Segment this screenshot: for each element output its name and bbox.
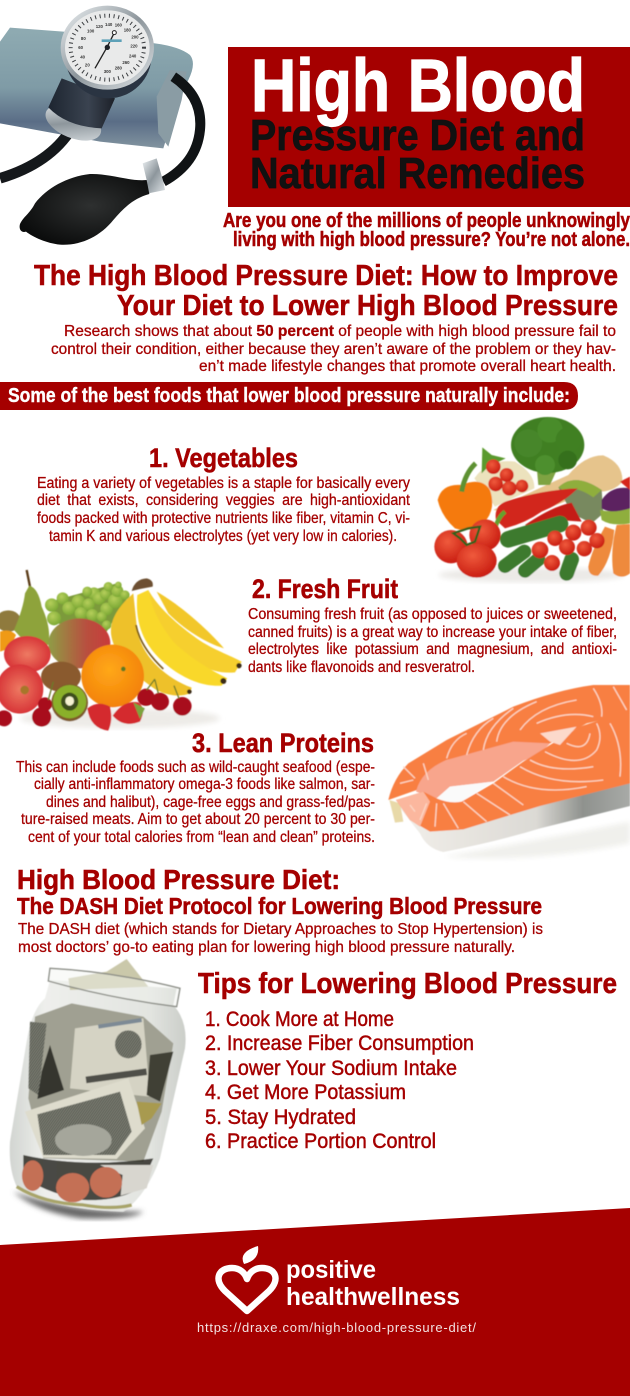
dial numbers: 60: [78, 45, 84, 50]
jar rim: [48, 968, 180, 1007]
cherry tomatoes front: [532, 520, 605, 571]
body: vegetables: tamin K and various electrolytes (yet very low in calories).: [49, 528, 397, 545]
title line 2: Pressure Diet and: [250, 111, 585, 160]
source url: https://draxe.com/high-blood-pressure-diet/: [197, 1320, 476, 1335]
gauge neck: [48, 78, 115, 128]
brand name: [286, 1256, 460, 1311]
body: lean proteins: [16, 759, 375, 846]
pale left edge: [396, 792, 430, 827]
heading: fresh fruit: 2. Fresh Fruit: [252, 574, 398, 604]
bill seal: [55, 1124, 112, 1156]
bulb: [20, 174, 149, 245]
cherry tomatoes top: [486, 459, 528, 496]
cuff fold: [157, 70, 187, 147]
bananas: [111, 578, 242, 696]
valve: [143, 158, 165, 193]
block: fresh fruit text: [248, 574, 617, 676]
pale center: [540, 727, 577, 745]
body: lean proteins: ture-raised meats. Aim to get about 20 percent to 30 per-: [21, 811, 375, 828]
dial numbers: 300: [104, 69, 112, 74]
red tip: [620, 477, 630, 490]
dial numbers: [78, 22, 139, 74]
strawberry leaves: [133, 702, 145, 719]
dial numbers: 40: [80, 54, 86, 59]
title line 3: Natural Remedies: [250, 149, 585, 198]
kiwi brown: [41, 662, 81, 692]
jar body: [10, 980, 186, 1212]
illustration: fresh fruit: [0, 570, 242, 731]
dial numbers: 160: [115, 23, 123, 28]
orange: [81, 645, 144, 707]
body: fresh fruit: [248, 606, 617, 676]
dial numbers: 220: [130, 43, 138, 48]
footer background: [0, 1208, 630, 1396]
orange slice back: [0, 631, 16, 652]
dial numbers: 120: [96, 24, 104, 29]
red chilies: [494, 488, 582, 536]
strawberries: [87, 702, 143, 731]
illustration: blood pressure cuff and gauge: [0, 6, 200, 245]
title panel: [228, 44, 630, 207]
hole: [437, 782, 493, 802]
frilly greens: [558, 480, 603, 523]
body: vegetables: foods packed with protective nutrients like fiber, vitamin C, vi-: [37, 510, 410, 527]
orange pepper: [438, 463, 492, 530]
floor shadow: [438, 568, 625, 582]
cauliflower and leaf: [474, 461, 534, 507]
dial numbers: 140: [105, 22, 113, 27]
block: vegetables text: [37, 443, 410, 545]
dial numbers: 100: [87, 29, 95, 34]
body: lean proteins: cially anti-inflammatory omega-3 foods like salmon, sar-: [34, 776, 375, 793]
skin: [395, 782, 630, 852]
floor shadow: [20, 708, 220, 728]
bill portrait: [115, 1030, 142, 1058]
body: lean proteins: dines and halibut), cage-free eggs and grass-fed/pas-: [46, 794, 375, 811]
section intro text: Research shows that about 50 percent of people with high blood pressure fail to: [64, 323, 616, 340]
kale frill: [600, 508, 630, 524]
tips list: 1. Cook More at Home: [205, 1008, 394, 1031]
section heading: [34, 260, 618, 322]
brand name: positive: [286, 1256, 376, 1284]
red apple back: [4, 636, 51, 673]
cuff: [0, 28, 193, 148]
heading: lean proteins: 3. Lean Proteins: [192, 728, 374, 758]
body: DASH: [18, 921, 543, 956]
coin wrapper: [100, 1165, 153, 1196]
base dark: [23, 1155, 153, 1200]
dial numbers: 200: [131, 35, 139, 40]
tips list: 5. Stay Hydrated: [205, 1106, 356, 1129]
carrots: [588, 524, 630, 577]
left tail: [389, 800, 403, 823]
bill text: [86, 1072, 147, 1080]
squash: [493, 455, 622, 517]
intro question: [223, 210, 630, 251]
illustration: salmon steak: [388, 685, 630, 858]
cherries: [0, 689, 192, 727]
left bill dark engraving: [28, 1022, 47, 1095]
dial numbers: 180: [124, 27, 132, 32]
heading: DASH line 2: The DASH Diet Protocol for Lowering Blood Pressure: [17, 893, 542, 919]
body: lean proteins: cent of your total calories from “lean and clean” proteins.: [28, 829, 375, 846]
bills behind: [28, 1003, 173, 1162]
body: vegetables: [37, 475, 410, 545]
dial numbers: 80: [81, 36, 86, 41]
fat lines: [400, 687, 627, 828]
yellow bill: [137, 1102, 162, 1125]
illustration: money jar: [10, 959, 186, 1219]
tips list: 3. Lower Your Sodium Intake: [205, 1057, 457, 1080]
right tube: [163, 77, 200, 182]
broccoli: [511, 417, 584, 485]
block: lean proteins text: [16, 728, 375, 846]
footer: [0, 1208, 630, 1396]
section intro text: control their condition, either because they aren’t aware of the problem or they hav-: [51, 341, 616, 358]
coins: [22, 1160, 122, 1202]
jar shadow: [13, 1192, 143, 1219]
front bill engraving: [37, 1092, 132, 1155]
body: lean proteins: This can include foods such as wild-caught seafood (espe-: [16, 759, 375, 776]
gauge dial: [61, 6, 154, 98]
orange stem: [121, 667, 126, 671]
grapes: [45, 582, 130, 632]
kiwi slice: [51, 684, 88, 721]
body: DASH: most doctors’ go-to eating plan for lowering high blood pressure naturally.: [18, 939, 515, 956]
tips list: 6. Practice Portion Control: [205, 1130, 436, 1153]
bill sticking out top: [68, 959, 148, 990]
kiwi back: [0, 610, 21, 632]
tips list: 2. Increase Fiber Consumption: [205, 1032, 474, 1055]
body: DASH: The DASH diet (which stands for Dietary Approaches to Stop Hypertension) is: [18, 921, 543, 938]
heading: DASH line 1: High Blood Pressure Diet:: [17, 864, 340, 895]
serial number: [98, 1020, 142, 1027]
tomato stem: [453, 527, 480, 545]
purple kale: [602, 488, 630, 512]
upper flesh: [388, 685, 630, 800]
body: vegetables: diet that exists, considering veggies are high-antioxidant: [37, 492, 410, 509]
large tomatoes: [434, 519, 501, 578]
left tube: [0, 128, 72, 178]
logo: heart with leaf: [219, 1246, 275, 1311]
section intro text: [51, 323, 616, 375]
section intro text: en’t made lifestyle changes that promote overall heart health.: [199, 358, 616, 375]
cherry stems: [48, 679, 179, 700]
brand name: healthwellness: [286, 1283, 460, 1311]
front bill: [25, 1078, 145, 1159]
belly inner: [416, 742, 550, 798]
illustration: vegetables: [434, 417, 630, 582]
upper bill: [70, 1018, 150, 1097]
jar base rim: [17, 1187, 132, 1207]
block: DASH diet: [17, 864, 543, 956]
dial numbers: 20: [85, 63, 90, 68]
tips list: [205, 1008, 474, 1153]
front coin over wrapper: [90, 1167, 122, 1198]
dark gap: [37, 1045, 64, 1099]
red apple front: [0, 664, 43, 714]
dial numbers: 240: [129, 53, 137, 58]
right dark: [147, 1052, 173, 1102]
lower flesh: [396, 710, 630, 832]
title box: [228, 47, 630, 207]
pear: [14, 570, 49, 645]
heading: vegetables: 1. Vegetables: [149, 443, 298, 473]
body: fresh fruit: dants like flavonoids and resveratrol.: [248, 659, 475, 676]
block: tips: [198, 968, 617, 1153]
gauge collar: [40, 97, 106, 148]
tips list: 4. Get More Potassium: [205, 1081, 406, 1104]
apple dimple: [20, 686, 29, 694]
body: vegetables: Eating a variety of vegetables is a staple for basically every: [37, 475, 410, 492]
dial numbers: 260: [122, 60, 130, 65]
cucumbers: [505, 524, 572, 573]
shadow: [443, 822, 630, 858]
dial numbers: 280: [115, 66, 123, 71]
mango: [48, 618, 110, 668]
